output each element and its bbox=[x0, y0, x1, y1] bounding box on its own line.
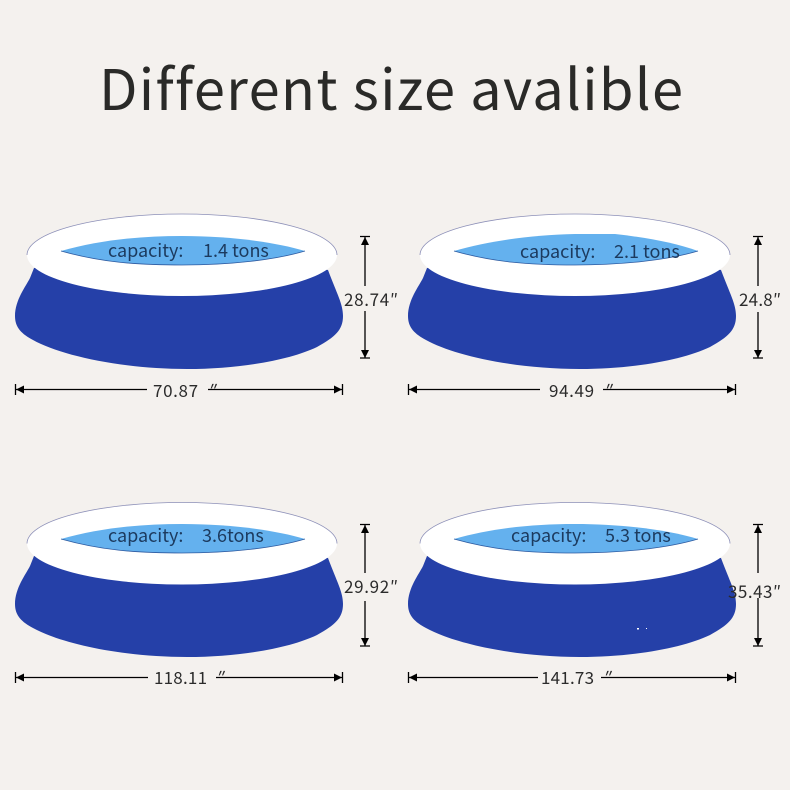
width dimension 4: ″ bbox=[602, 664, 613, 689]
height dimension 3: 29.92″ bbox=[344, 573, 398, 598]
width dimension 1: 70.87 bbox=[153, 377, 198, 402]
width dimension 2 bbox=[408, 377, 736, 402]
capacity label 3: 3.6tons bbox=[202, 522, 264, 548]
width dimension 4 bbox=[408, 664, 736, 689]
icon: pool 4 water bbox=[454, 524, 698, 553]
capacity label 3: capacity: bbox=[108, 522, 183, 548]
icon: pool 3 body bbox=[15, 528, 343, 657]
width dimension 2: ″ bbox=[603, 377, 614, 402]
icon: pool 2 water bbox=[454, 234, 698, 265]
icon: pool 2 rim bbox=[420, 214, 730, 296]
height dimension 4 bbox=[728, 524, 781, 646]
height dimension 1: 28.74″ bbox=[344, 286, 398, 311]
height dimension 1 bbox=[344, 236, 398, 358]
icon: pool 1 body bbox=[15, 240, 343, 369]
width dimension 1: ″ bbox=[207, 377, 218, 402]
capacity label 4: 5.3 tons bbox=[605, 522, 671, 548]
capacity label 2: 2.1 tons bbox=[614, 238, 680, 264]
height dimension 3 bbox=[344, 524, 398, 646]
width dimension 3: 118.11 bbox=[154, 664, 207, 689]
icon: pool 3 water bbox=[61, 524, 305, 553]
icon: pool 1 rim bbox=[27, 214, 337, 296]
height dimension 2 bbox=[739, 236, 781, 358]
height dimension 2: 24.8″ bbox=[739, 286, 781, 311]
icon: pool 1 water bbox=[61, 236, 305, 265]
panel: pool 4 bbox=[408, 502, 781, 689]
icon: pool 4 body bbox=[408, 528, 736, 657]
capacity label 4: capacity: bbox=[511, 522, 586, 548]
width dimension 4: 141.73 bbox=[541, 664, 594, 689]
width dimension 3: ″ bbox=[215, 664, 226, 689]
panel: pool 3 bbox=[15, 502, 398, 689]
width dimension 2: 94.49 bbox=[549, 377, 594, 402]
icon: pool 3 rim bbox=[27, 502, 337, 584]
height dimension 4: 35.43″ bbox=[728, 578, 781, 603]
capacity label 2: capacity: bbox=[520, 238, 595, 264]
capacity label 1: capacity: bbox=[108, 237, 183, 263]
icon: pool 4 specks bbox=[637, 628, 647, 630]
title: Different size avalible bbox=[99, 46, 683, 127]
icon: pool 2 body bbox=[408, 240, 736, 369]
width dimension 1 bbox=[16, 377, 342, 402]
width dimension 3 bbox=[16, 664, 342, 689]
panel: pool 1 bbox=[15, 214, 398, 402]
capacity label 1: 1.4 tons bbox=[203, 237, 269, 263]
panel: pool 2 bbox=[408, 214, 781, 402]
icon: pool 4 rim bbox=[420, 502, 730, 584]
